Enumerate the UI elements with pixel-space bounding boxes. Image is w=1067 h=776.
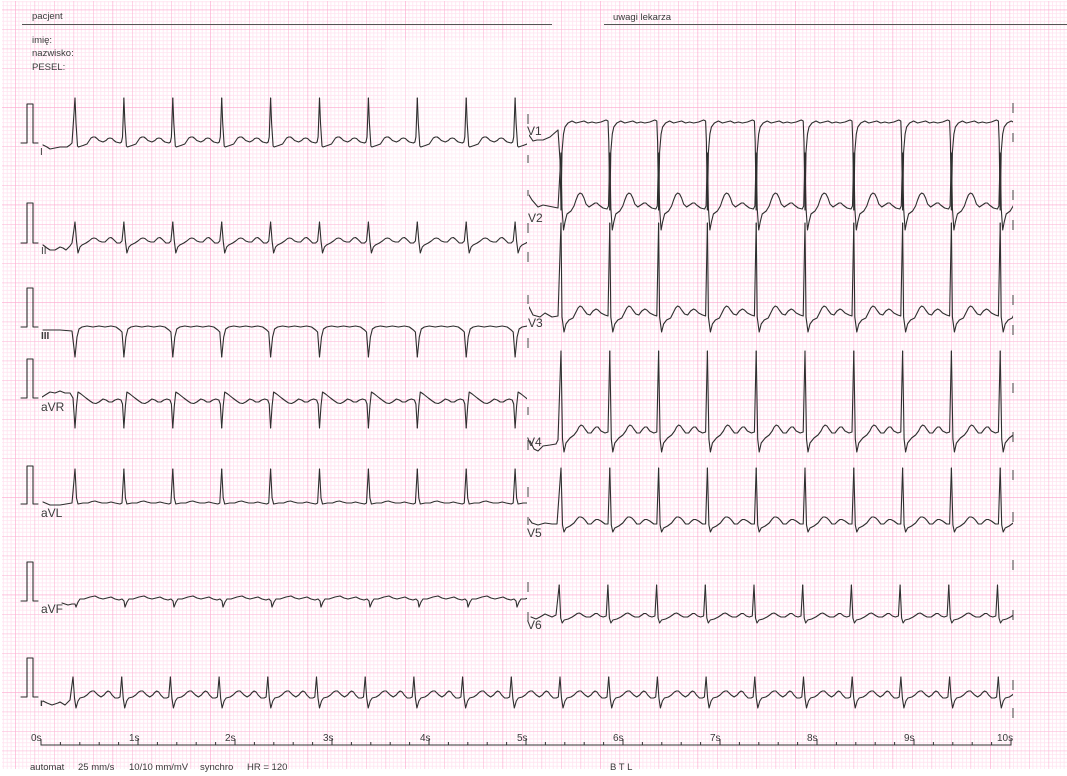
time axis bbox=[31, 733, 1013, 745]
second labels: 4s bbox=[420, 733, 431, 744]
footer settings: 25 mm/s bbox=[78, 762, 115, 773]
label: aVR: aVR bbox=[41, 400, 65, 414]
trace: lead II bbox=[43, 222, 564, 253]
second labels: 1s bbox=[129, 733, 140, 744]
label: I: I bbox=[40, 147, 43, 158]
second labels: 10s bbox=[997, 733, 1013, 744]
second labels: 2s bbox=[225, 733, 236, 744]
trace: lead aVL bbox=[43, 469, 564, 505]
label: V2: V2 bbox=[528, 211, 543, 225]
patient rule bbox=[22, 24, 552, 26]
trace: lead V2 bbox=[529, 153, 1049, 230]
heading: pacjent: pacjent bbox=[32, 11, 63, 22]
trace: lead aVR bbox=[42, 391, 564, 428]
label: V4: V4 bbox=[527, 435, 542, 449]
dashed separator at 5 s bbox=[527, 114, 529, 622]
footer settings: B T L bbox=[610, 762, 632, 773]
label: V1: V1 bbox=[527, 124, 542, 138]
second labels: 0s bbox=[31, 733, 42, 744]
trace: rhythm strip bbox=[43, 677, 1047, 708]
label: V3: V3 bbox=[528, 316, 543, 330]
notes rule bbox=[604, 24, 1067, 26]
field: nazwisko: nazwisko: bbox=[32, 48, 74, 59]
footer settings: automat bbox=[30, 762, 65, 773]
label: III: III bbox=[41, 331, 50, 342]
trace: lead V6 bbox=[531, 585, 1046, 623]
footer settings: HR = 120 bbox=[247, 762, 287, 773]
label: V5: V5 bbox=[527, 526, 542, 540]
trace: lead V1 bbox=[529, 120, 1049, 210]
second labels: 9s bbox=[904, 733, 915, 744]
lead labels bbox=[40, 124, 543, 709]
second labels: 8s bbox=[807, 733, 818, 744]
calibration pulses bbox=[21, 104, 38, 697]
label: aVL: aVL bbox=[41, 506, 63, 520]
trace: lead I bbox=[43, 98, 564, 149]
axis line and ticks bbox=[41, 739, 1011, 745]
label: V6: V6 bbox=[527, 618, 542, 632]
footer settings: synchro bbox=[200, 762, 233, 773]
trace: lead III bbox=[43, 326, 564, 357]
trace: lead V3 bbox=[529, 223, 1049, 332]
field: PESEL: PESEL: bbox=[32, 62, 65, 73]
second labels: 7s bbox=[710, 733, 721, 744]
label: aVF: aVF bbox=[41, 602, 63, 616]
second labels bbox=[31, 733, 1013, 744]
heading: uwagi lekarza: uwagi lekarza bbox=[613, 12, 672, 23]
second labels: 5s bbox=[517, 733, 528, 744]
label: rhythm lead: r bbox=[40, 698, 44, 709]
footer settings: 10/10 mm/mV bbox=[129, 762, 189, 773]
dashed end marker at 10 s bbox=[1012, 103, 1014, 718]
second labels: 3s bbox=[323, 733, 334, 744]
second labels: 6s bbox=[613, 733, 624, 744]
footer settings bbox=[30, 762, 632, 773]
field: imię: imię: bbox=[32, 35, 52, 46]
patient header bbox=[22, 11, 552, 73]
trace: lead aVF bbox=[62, 596, 566, 607]
trace: lead V5 bbox=[529, 468, 1049, 532]
trace: lead V4 bbox=[530, 351, 1049, 452]
label: II: II bbox=[41, 246, 47, 257]
